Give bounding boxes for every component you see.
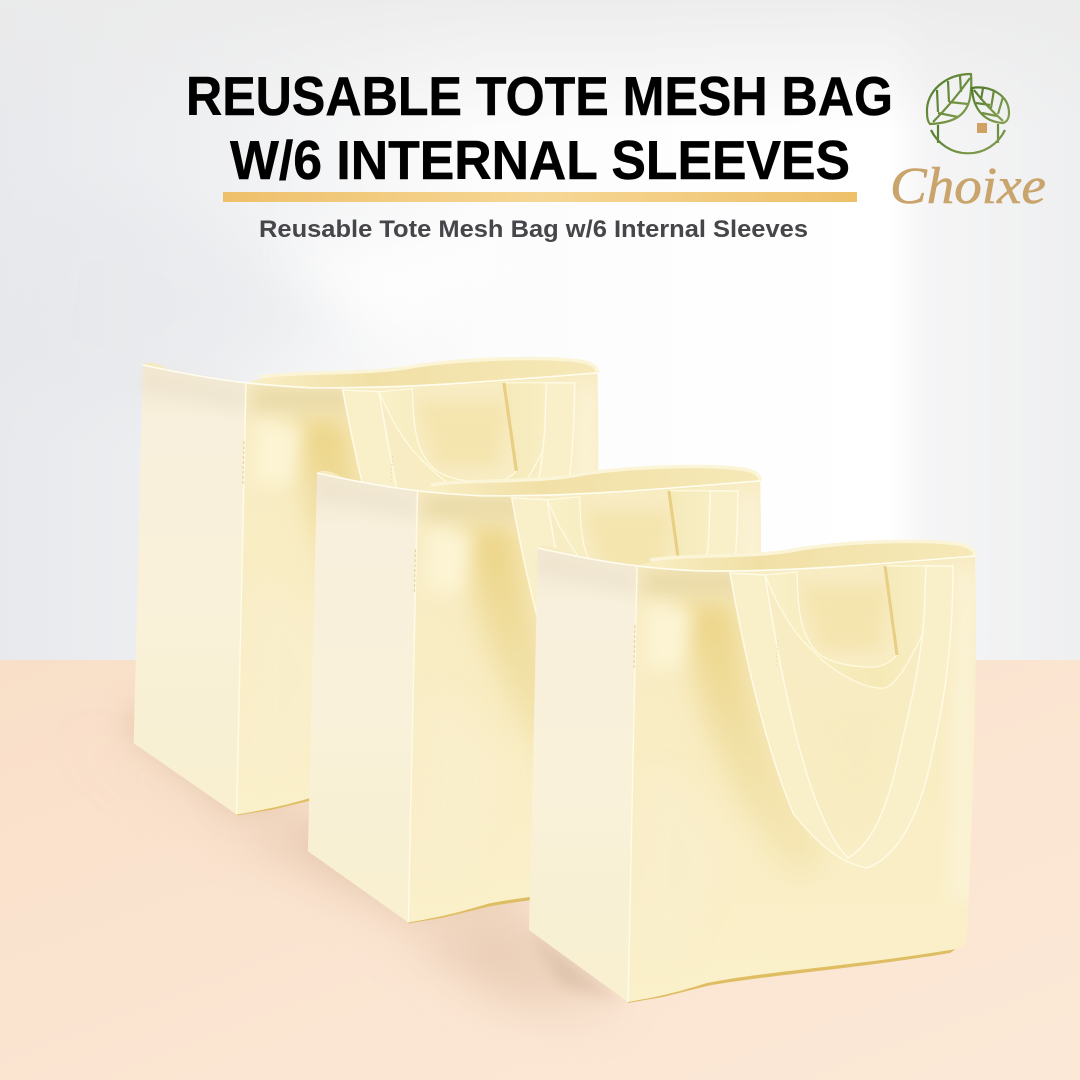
- floor shadows: [60, 700, 625, 1010]
- wordmark: Choixe: [890, 158, 1046, 215]
- floor: [0, 660, 1080, 1080]
- tote bag: front right: [529, 541, 976, 1003]
- subtitle: Reusable Tote Mesh Bag w/6 Internal Sleeves: [259, 216, 808, 243]
- icon: window: [977, 123, 987, 133]
- title: [186, 65, 893, 191]
- tote bag: middle: [308, 467, 761, 923]
- icon: house in leaves: [927, 74, 1009, 153]
- title: W/6 INTERNAL SLEEVES: [230, 129, 850, 191]
- title underline: [223, 192, 857, 202]
- background wall: [0, 0, 1080, 660]
- tote bag: back left: [134, 359, 598, 815]
- title: REUSABLE TOTE MESH BAG: [186, 65, 893, 127]
- logo: Choixe: [890, 74, 1046, 215]
